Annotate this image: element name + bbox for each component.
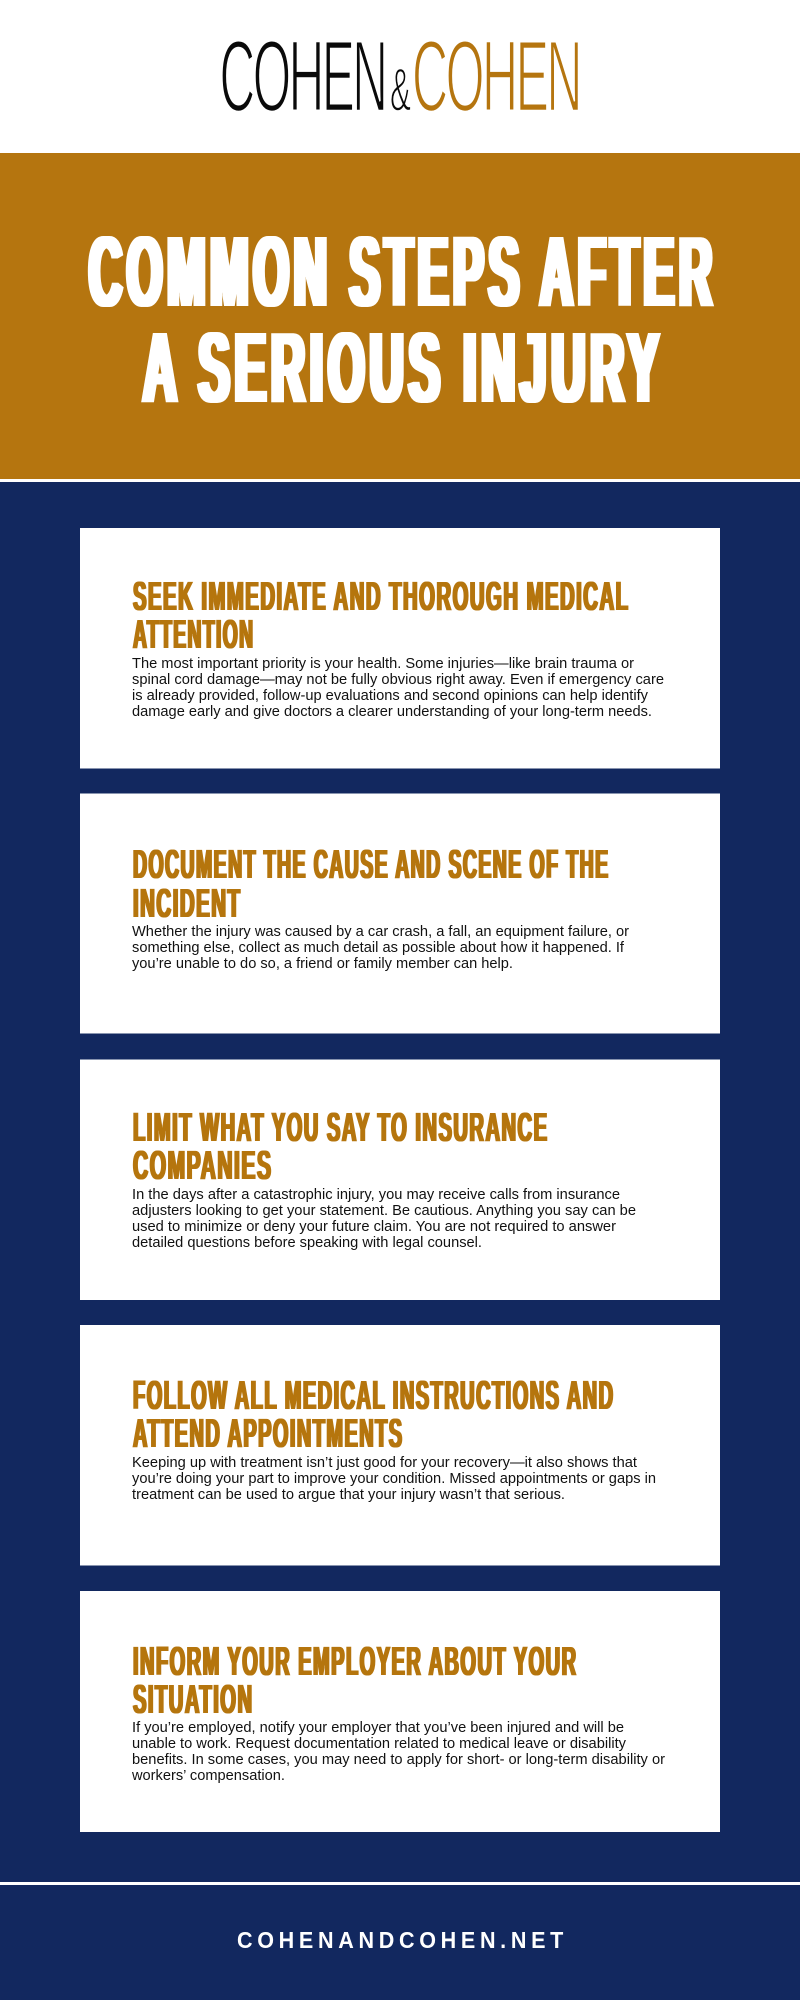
heading	[133, 1638, 578, 1722]
heading: INCIDENT	[133, 880, 242, 926]
heading	[133, 841, 610, 926]
heading: ATTENTION	[133, 611, 254, 657]
body text: you’re doing your part to improve your condition. Missed appointments or gaps in	[132, 1470, 656, 1487]
body text	[132, 923, 629, 972]
body text: Whether the injury was caused by a car crash, a fall, an equipment failure, or	[132, 923, 629, 940]
body text	[132, 1454, 656, 1503]
logo: COHEN	[412, 21, 580, 133]
body text: workers’ compensation.	[131, 1767, 285, 1784]
title	[89, 216, 717, 424]
body text: The most important priority is your health. Some injuries—like brain trauma or	[132, 655, 634, 672]
heading: SITUATION	[133, 1676, 254, 1722]
heading	[133, 573, 630, 657]
panel: document the incident	[80, 794, 720, 1034]
body text: spinal cord damage—may not be fully obvious right away. Even if emergency care	[132, 671, 664, 688]
body text	[132, 1186, 636, 1251]
panel: seek medical attention	[80, 528, 720, 768]
heading: COMPANIES	[133, 1142, 272, 1188]
body text: detailed questions before speaking with legal counsel.	[132, 1234, 482, 1251]
heading: ATTEND APPOINTMENTS	[133, 1410, 404, 1456]
logo: COHEN	[220, 21, 386, 133]
body text: damage early and give doctors a clearer understanding of your long-term needs.	[132, 703, 652, 720]
body text: In the days after a catastrophic injury, you may receive calls from insurance	[132, 1186, 620, 1203]
body text: adjusters looking to get your statement. Be cautious. Anything you say can be	[132, 1202, 636, 1219]
body text: treatment can be used to argue that your injury wasn’t that serious.	[132, 1486, 565, 1503]
body text: is already provided, follow-up evaluations and second opinions can help identify	[132, 687, 648, 704]
body text	[131, 1719, 665, 1784]
body text: something else, collect as much detail as possible about how it happened. If	[132, 939, 625, 956]
body text: benefits. In some cases, you may need to apply for short- or long-term disability or	[132, 1751, 665, 1768]
logo	[0, 0, 800, 153]
body text: Keeping up with treatment isn’t just good for your recovery—it also shows that	[132, 1454, 638, 1471]
body text: you’re unable to do so, a friend or family member can help.	[132, 955, 513, 972]
footer	[0, 1882, 800, 1953]
body text: unable to work. Request documentation related to medical leave or disability	[132, 1735, 626, 1752]
heading	[133, 1104, 548, 1188]
body text	[132, 655, 664, 720]
heading	[133, 1372, 614, 1456]
panel: limit what you say	[80, 1060, 720, 1300]
logo: &	[390, 56, 411, 124]
body text: used to minimize or deny your future claim. You are not required to answer	[132, 1218, 616, 1235]
footer: COHENANDCOHEN.NET	[237, 1927, 568, 1953]
panel: inform your employer	[80, 1591, 720, 1832]
panel: follow medical instructions	[80, 1325, 720, 1566]
body text: If you’re employed, notify your employer that you’ve been injured and will be	[132, 1719, 624, 1736]
title banner	[0, 153, 800, 482]
